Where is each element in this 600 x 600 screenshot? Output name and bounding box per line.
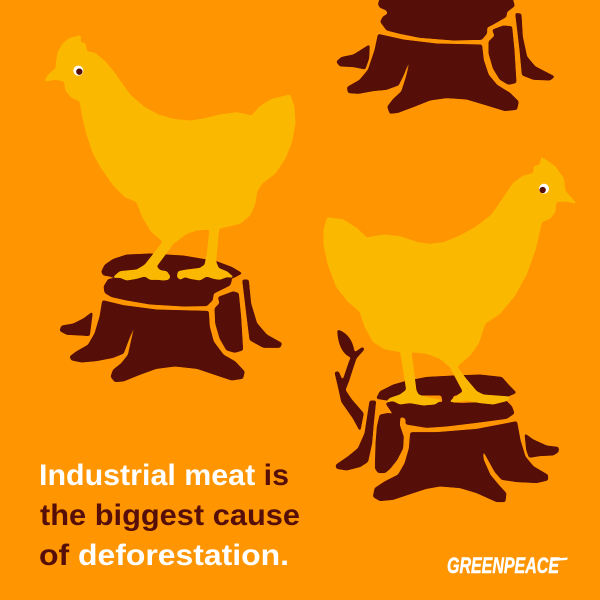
tree stump: under left chicken bbox=[60, 254, 282, 382]
chicken: right, facing right bbox=[324, 157, 576, 405]
eye bbox=[73, 66, 83, 76]
logo: Greenpeace: GREENPEACE bbox=[447, 553, 560, 578]
headline line 3: of deforestation. bbox=[39, 539, 289, 572]
headline line 1: Industrial meat is bbox=[39, 459, 289, 492]
tree stump: top right, cropped bbox=[337, 0, 554, 113]
tree stump with twig: under right chicken bbox=[335, 330, 558, 502]
headline bbox=[39, 459, 300, 572]
headline line 2: the biggest cause bbox=[40, 499, 300, 532]
twig with leaf bbox=[335, 330, 364, 431]
eye bbox=[539, 184, 549, 194]
chicken: left, facing left bbox=[45, 36, 295, 280]
